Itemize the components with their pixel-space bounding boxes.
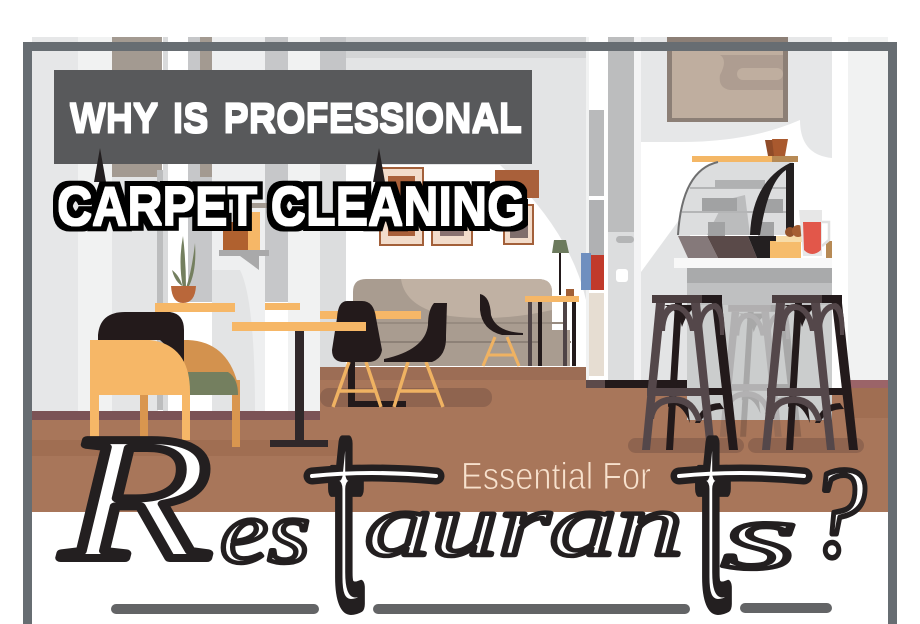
table near [270, 331, 406, 447]
floor [32, 380, 889, 512]
script title: restaurants: R [61, 398, 212, 597]
bar stools [628, 295, 864, 453]
table far [320, 311, 421, 319]
chair: black side [384, 303, 447, 407]
bar counter [674, 258, 832, 437]
shelf with cups [692, 139, 798, 162]
wall painting [667, 37, 788, 122]
chair: far [480, 294, 523, 366]
wall shelf with box [219, 203, 270, 270]
side table with lamp [525, 240, 579, 366]
bottom panel [32, 512, 888, 624]
books [581, 253, 604, 290]
placeholder rules [111, 603, 832, 614]
subheading: essential for: Essential For [461, 456, 651, 498]
script title: restaurants [61, 379, 866, 624]
chair: black front [232, 301, 382, 407]
juice jug [799, 210, 832, 258]
script title: restaurants: es [220, 483, 310, 582]
cake display case [678, 162, 804, 258]
heading: carpet cleaning: CARPET CLEANING [57, 175, 525, 237]
script title: restaurants: s [722, 483, 797, 589]
script title: restaurants: ? [808, 441, 866, 585]
heading banner: WHY IS PROFESSIONAL [70, 95, 522, 141]
scene background: restaurant interior [31, 37, 888, 417]
sofa [353, 279, 571, 366]
platform [320, 367, 586, 407]
script title: restaurants: auran [365, 476, 683, 575]
plant on shelf [155, 236, 300, 312]
heading banner [54, 70, 532, 164]
heading: carpet cleaning [57, 148, 525, 237]
wall picture frames [380, 168, 539, 245]
armchair [90, 312, 240, 447]
